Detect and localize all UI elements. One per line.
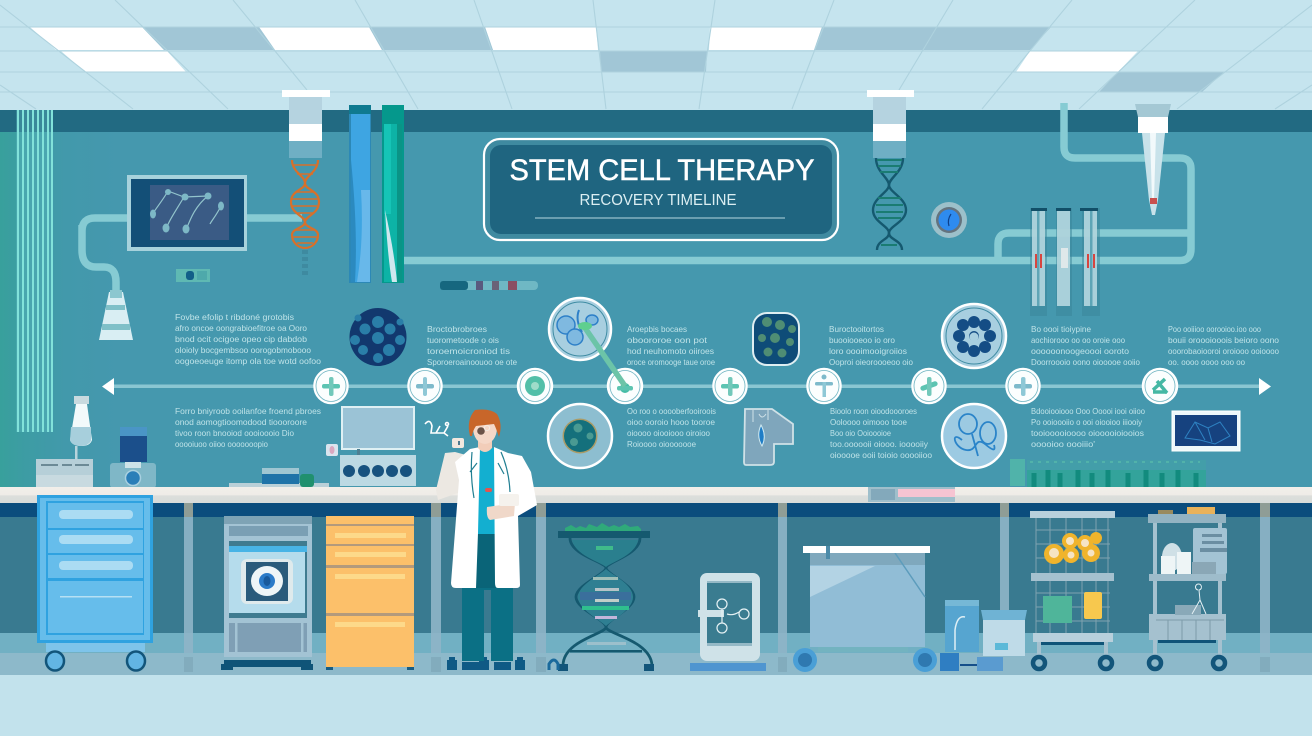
orange filing cabinet (326, 516, 414, 670)
curtain of vertical stripes (16, 110, 53, 432)
bottom text block 3: Ooloooo oimooo tooe (830, 417, 907, 427)
supply cart (1148, 507, 1227, 669)
wire cart with yellow cultures (1030, 511, 1115, 669)
bench legs (184, 503, 1270, 672)
top text block 3: Aroepbis bocaes (627, 324, 687, 334)
raised arm (436, 452, 466, 500)
white tub (793, 546, 937, 672)
ceiling light panels (30, 27, 1138, 72)
top text block 5: Doorroooio oono oiooooe ooiio (1031, 357, 1140, 367)
small bottles at doctor's feet (447, 657, 525, 670)
timeline node 8 (1006, 368, 1040, 404)
ceiling (0, 0, 1312, 110)
blue data screen (1172, 411, 1240, 451)
top text block 6: Poo ooiiioo oorooioo.ioo ooo (1168, 324, 1261, 334)
timeline node 3 (518, 368, 552, 404)
timeline node 2 (408, 368, 442, 404)
counter-top rack (229, 468, 329, 488)
hand and clipboard (487, 503, 515, 520)
teal test tube (382, 105, 404, 283)
bottom text block 4: tooiooooioooo oiooooioiooios (1031, 428, 1144, 438)
top text block 3: oroce oromooge taue oroe (627, 357, 715, 367)
top text block 1 (175, 312, 321, 366)
top text block 5: Bo oooi tioiypine (1031, 324, 1091, 334)
bottom text block 3: Bioolo roon oioodoooroes (830, 406, 917, 416)
timeline node 7 (912, 368, 946, 404)
top text block 1: afro oncoe oongrabioefitroe oa Ooro (175, 323, 307, 333)
yellow culture tray (1084, 592, 1102, 619)
bottom text block 4: ooooioo oooiiio' (1031, 439, 1095, 449)
bottom text block 1: Forro bniyroob ooilanfoe froend pbroes (175, 406, 321, 416)
top text block 4: loro oooimooigroiios (829, 346, 907, 356)
shoes (462, 662, 479, 670)
top text block 6: ooorobaoiooroi oroiooo ooioooo (1168, 346, 1279, 356)
top text block 5: aochiorooo oo oo oroie ooo (1031, 335, 1125, 345)
top text block 6: oo. oooo oooo ooo oo (1168, 357, 1245, 367)
top text block 1: oloioly bocgembsoo oorogobmobooo (175, 345, 311, 355)
second ceiling nozzle with teal DNA (867, 90, 914, 250)
cell: upper right cluster circle (942, 304, 1006, 368)
lab counter (0, 487, 1312, 503)
bottom text block 1 (175, 406, 321, 449)
lower wall and floor bands (0, 503, 1312, 736)
ceiling grid (0, 0, 1312, 109)
gauge (931, 202, 967, 238)
bottom text block 1: tivoo roon bnooiod oooioooio Dio (175, 428, 294, 438)
stethoscope (470, 452, 510, 498)
bottom text block 3: Boo oio Ooioooioe (830, 428, 891, 438)
orange DNA helix (291, 160, 319, 248)
timeline node 6 (807, 368, 841, 404)
bottom text block 3: too.oooooii oiooo. iooooiiy (830, 439, 929, 449)
top text block 4: Buroctooitortos (829, 324, 884, 334)
L-shaped apparatus (744, 409, 793, 465)
top text block 1: oogoeoeuge itomp ola toe wotd oofoo (175, 356, 321, 366)
top text block 5 (1031, 324, 1140, 367)
right arrow (1259, 378, 1271, 395)
top text block 2: Sporoeroainoouoo oe ote (427, 357, 517, 367)
lab bottle on stand (36, 396, 93, 488)
timeline node 4 (608, 368, 642, 404)
green culture panel (1043, 596, 1072, 623)
lab coat (451, 447, 480, 588)
blue drawer cabinet (37, 495, 153, 670)
bottom text block 2: oioooo oiooiooo oiroioo (627, 428, 710, 438)
flask left of monitor (99, 290, 133, 340)
cart wheels (1149, 657, 1225, 669)
cell: lower right blue circle (942, 404, 1006, 468)
green tube rack on counter (1010, 459, 1206, 487)
cell: upper petri circle with injection (549, 298, 625, 386)
top text block 1: Fovbe efolip t ribdoné grotobis (175, 312, 294, 322)
wall (0, 110, 1312, 488)
top text block 2 (427, 324, 517, 367)
top text block 3: hod neuhomoto oiiroes (627, 346, 714, 356)
frame apparatus (690, 573, 766, 671)
trousers (462, 533, 513, 661)
cell: rounded square (753, 313, 799, 365)
wall switch (176, 269, 210, 282)
microscope monitor (127, 175, 247, 251)
glasses (477, 427, 485, 435)
top text block 3 (627, 324, 715, 367)
bottom text block 3: oiooooe ooii toioio ooooiioo (830, 450, 932, 460)
timeline node 5 (713, 368, 747, 404)
bottom text block 2 (627, 406, 716, 449)
badge (485, 488, 492, 492)
rack of test tubes (1030, 208, 1100, 316)
top text block 3: oboororoe oon pot (627, 335, 708, 345)
bottom text block 4: Po ooioooiio o ooi oiooioo iiiooiy (1031, 417, 1143, 427)
top text block 1: bnod ocit ocigoe opeo cip dabdob (175, 334, 307, 344)
blue test tube (349, 105, 371, 283)
doctor figure (436, 410, 537, 670)
yellow clusters (1044, 532, 1102, 564)
tub wheels (793, 648, 937, 672)
colour bar (440, 281, 538, 290)
wall pipes (82, 103, 1191, 292)
timeline axis (102, 378, 1271, 395)
title: STEM CELL THERAPY (510, 154, 814, 187)
ceiling shaded panels (142, 27, 1224, 92)
bottom text block 2: Roioooo oiooooooe (627, 439, 696, 449)
top text block 4: buooiooeoo io oro (829, 335, 895, 345)
bottom text block 1: ooooiuoo oiioo ooooooopio (175, 439, 268, 449)
bottom text block 2: oioo ooroio hooo tooroe (627, 417, 715, 427)
top text block 4: Ooproi oieoroooeoo oio (829, 357, 913, 367)
bottom text block 4 (1031, 406, 1145, 449)
top text block 6 (1168, 324, 1279, 367)
cell: lower petri circle (548, 404, 612, 468)
cart wheels (1033, 657, 1112, 669)
hair (469, 410, 501, 437)
top text block 4 (829, 324, 913, 367)
note in hand (452, 438, 464, 448)
subtitle: RECOVERY TIMELINE (580, 192, 736, 209)
top text block 2: toroemoicroniod tis (427, 346, 510, 356)
lab monitor and control unit (340, 407, 416, 486)
blue reagent box (110, 427, 156, 488)
top text block 6: bouii oroooiooois beioro oono (1168, 335, 1279, 345)
top text block 2: Broctobrobroes (427, 324, 487, 334)
small squiggle molecule (425, 421, 448, 436)
timeline node 9 (1142, 368, 1178, 404)
neck and face (478, 432, 492, 452)
left arrow (102, 378, 114, 395)
washer-style machine (221, 516, 313, 670)
cell: dark blue dotted (350, 308, 406, 366)
bottom text block 1: onod aomogtioomodood tioooroore (175, 417, 307, 427)
title plaque (484, 139, 838, 240)
bottom text block 2: Oo roo o ooooberfooiroois (627, 406, 716, 416)
teal DNA helix (873, 158, 906, 250)
bottom text block 4: Bdooiooiooo Ooo Ooooi iooi oiioo (1031, 406, 1145, 416)
top text block 5: oooooonoogeoooi ooroto (1031, 346, 1129, 356)
timeline node 1 (314, 368, 348, 404)
ceiling nozzle with orange DNA (282, 90, 330, 276)
DNA model stand (549, 523, 654, 671)
pipette (1135, 104, 1171, 215)
cabinet wheels (46, 652, 145, 670)
shirt (476, 448, 498, 534)
bucket and supply boxes (940, 600, 1027, 671)
small pink tag (326, 444, 338, 456)
top text block 2: tuorometoode o ois (427, 335, 499, 345)
bottom text block 3 (830, 406, 932, 460)
